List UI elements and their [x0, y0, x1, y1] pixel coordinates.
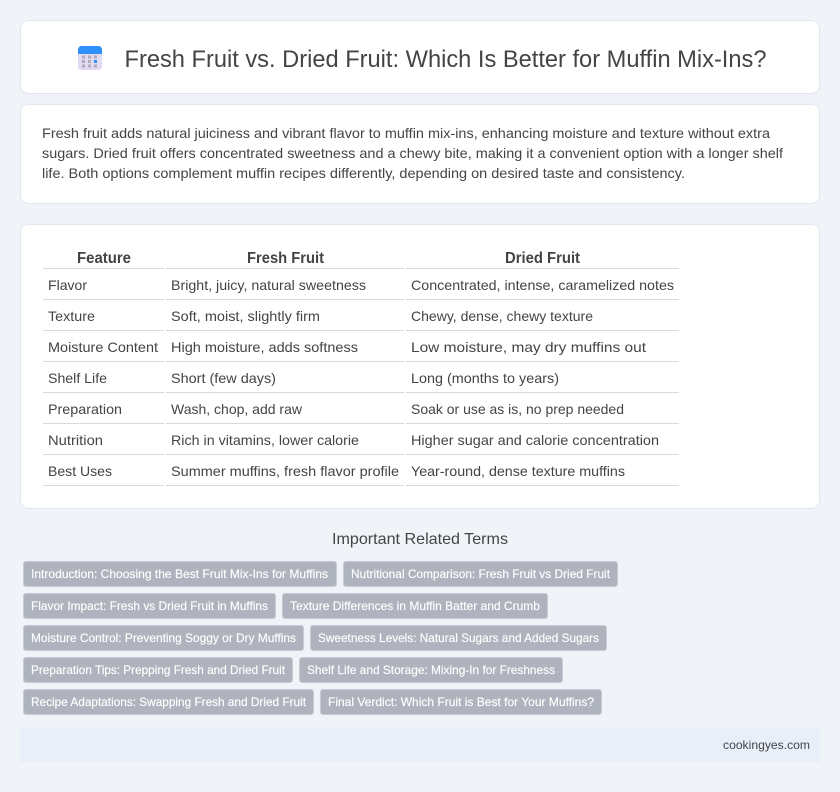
row: preparation: Wash, chop, add raw: [171, 401, 303, 417]
table header row: Dried Fruit: [505, 250, 581, 267]
row: shelf life: Shelf Life: [48, 370, 107, 386]
row: flavor: Flavor: [48, 277, 87, 293]
comparison table card: [20, 224, 820, 508]
tag: moisture control: Moisture Control: Preventing Soggy or Dry Muffins: [31, 631, 296, 645]
tag: recipe adaptations: [24, 690, 314, 714]
header card: [20, 20, 820, 94]
row: shelf life: Short (few days): [171, 370, 276, 386]
tag: shelf life and storage: Shelf Life and Storage: Mixing-In for Freshness: [307, 663, 555, 677]
intro text card: sugars. Dried fruit offers concentrated sweetness and a chewy bite, making it a convenient option with a longer shelf: [42, 145, 783, 161]
table header row: Fresh Fruit: [247, 250, 325, 267]
footer bar: [20, 728, 820, 762]
tag: preparation tips: [24, 658, 292, 682]
row: flavor: [48, 277, 674, 293]
tag: texture differences: [282, 594, 548, 618]
row: flavor: Concentrated, intense, caramelized notes: [411, 277, 674, 293]
row: texture: Texture: [48, 308, 95, 324]
row: preparation: Preparation: [48, 401, 122, 417]
row: shelf life: [48, 370, 559, 386]
tag: flavor impact: [24, 594, 276, 618]
row: texture: [48, 308, 593, 324]
row: best uses: Summer muffins, fresh flavor profile: [171, 463, 399, 479]
icon: calendar: [78, 46, 102, 70]
related term tags: [24, 562, 618, 714]
row: flavor: Bright, juicy, natural sweetness: [171, 277, 366, 293]
related terms heading: Important Related Terms: [332, 531, 508, 548]
tag: recipe adaptations: Recipe Adaptations: Swapping Fresh and Dried Fruit: [31, 695, 307, 709]
tag: moisture control: [24, 626, 304, 650]
tag: flavor impact: Flavor Impact: Fresh vs Dried Fruit in Muffins: [31, 599, 268, 613]
row: best uses: Year-round, dense texture muffins: [411, 463, 625, 479]
row: nutrition: Nutrition: [48, 432, 103, 448]
row: moisture content: [48, 339, 646, 355]
row: nutrition: Higher sugar and calorie concentration: [411, 432, 659, 448]
tag: introduction: Introduction: Choosing the Best Fruit Mix-Ins for Muffins: [31, 567, 328, 581]
tag: sweetness levels: [310, 626, 606, 650]
tag: nutritional comparison: Nutritional Comparison: Fresh Fruit vs Dried Fruit: [351, 567, 611, 581]
tag: introduction: [24, 562, 336, 586]
tag: final verdict: [320, 690, 602, 714]
intro text card: [20, 104, 820, 204]
row: preparation: Soak or use as is, no prep needed: [411, 401, 624, 417]
row: moisture content: Low moisture, may dry muffins out: [411, 339, 646, 355]
tag: texture differences: Texture Differences in Muffin Batter and Crumb: [290, 599, 540, 613]
title: Fresh Fruit vs. Dried Fruit: Which Is Better for Muffin Mix-Ins?: [124, 46, 766, 73]
row: best uses: Best Uses: [48, 463, 112, 479]
table header row: [77, 250, 581, 267]
tag: nutritional comparison: [344, 562, 618, 586]
row: shelf life: Long (months to years): [411, 370, 559, 386]
tag: sweetness levels: Sweetness Levels: Natural Sugars and Added Sugars: [318, 631, 599, 645]
row: preparation: [48, 401, 624, 417]
row: moisture content: High moisture, adds softness: [171, 339, 358, 355]
footer source: cookingyes.com: [723, 738, 810, 752]
tag: final verdict: Final Verdict: Which Fruit is Best for Your Muffins?: [328, 695, 594, 709]
table header row: Feature: [77, 250, 131, 267]
row: nutrition: Rich in vitamins, lower calorie: [171, 432, 359, 448]
tag: preparation tips: Preparation Tips: Prepping Fresh and Dried Fruit: [31, 663, 286, 677]
row: moisture content: Moisture Content: [48, 339, 158, 355]
row: texture: Chewy, dense, chewy texture: [411, 308, 593, 324]
row: texture: Soft, moist, slightly firm: [171, 308, 320, 324]
intro text card: Fresh fruit adds natural juiciness and vibrant flavor to muffin mix-ins, enhancing moisture and texture without extra: [42, 125, 770, 141]
intro text card: life. Both options complement muffin recipes differently, depending on desired taste and consistency.: [42, 165, 685, 181]
row: nutrition: [48, 432, 659, 448]
tag: shelf life and storage: [300, 658, 562, 682]
row: best uses: [48, 463, 625, 479]
